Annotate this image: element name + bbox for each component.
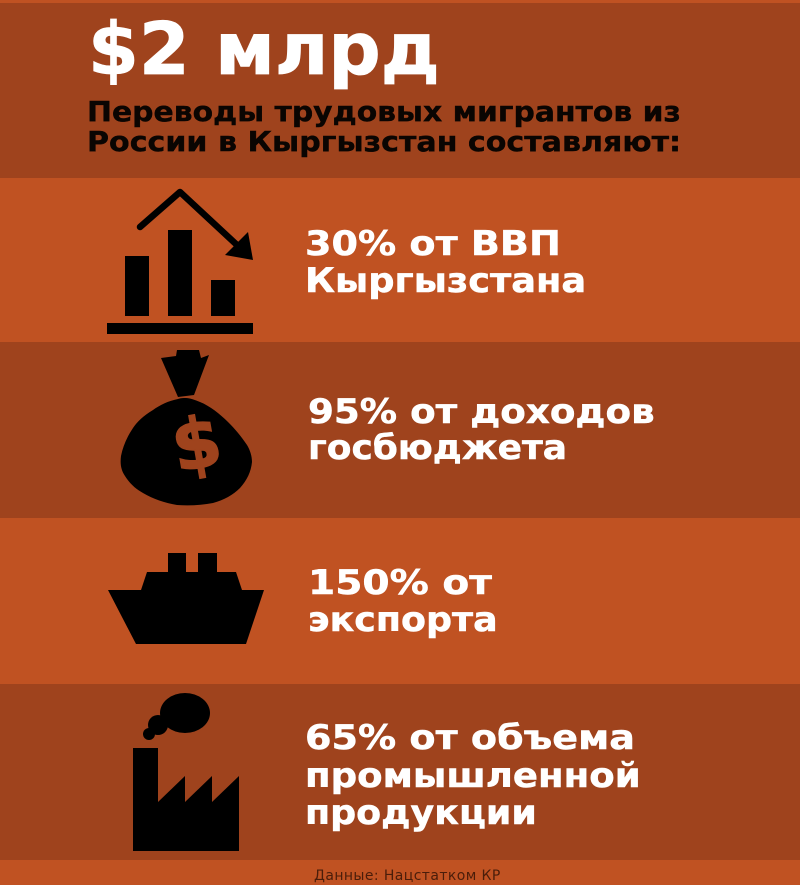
band: row 1 background <box>0 178 800 342</box>
row 2 text: 95% от доходов <box>308 392 655 432</box>
row 1 text <box>305 224 586 301</box>
title: $2 млрд <box>88 7 440 91</box>
footer source note: Данные: Нацстатком КР <box>314 868 501 884</box>
row 1 text: Кыргызстана <box>305 261 586 301</box>
row 4 text: продукции <box>305 793 537 833</box>
row 2 text <box>308 392 655 468</box>
row 2 text: госбюджета <box>308 428 567 468</box>
row 4 text: 65% от объема <box>305 718 635 758</box>
subtitle: Переводы трудовых мигрантов из <box>87 95 681 128</box>
band: row 3 background <box>0 518 800 684</box>
icon: money bag: $ <box>166 399 228 489</box>
band: row 4 background <box>0 684 800 860</box>
band: header background <box>0 3 800 178</box>
subtitle <box>87 95 681 158</box>
band: row 2 background <box>0 342 800 518</box>
row 3 text: экспорта <box>308 600 498 640</box>
row 1 text: 30% от ВВП <box>305 224 561 264</box>
subtitle: России в Кыргызстан составляют: <box>87 125 681 158</box>
row 3 text <box>308 563 498 640</box>
row 3 text: 150% от <box>308 563 492 603</box>
band: footer background <box>0 860 800 885</box>
row 4 text: промышленной <box>305 756 641 796</box>
row 4 text <box>305 718 641 833</box>
